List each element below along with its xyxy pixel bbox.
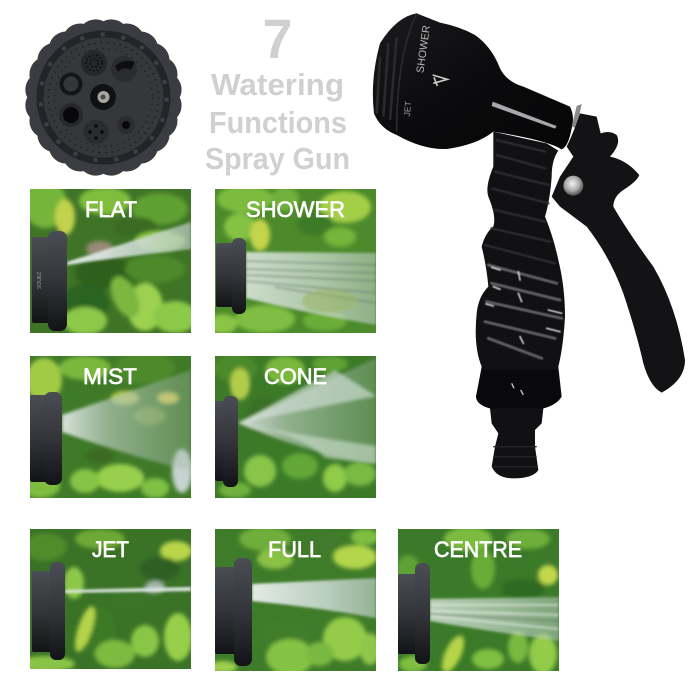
panel: centre [396,527,559,676]
icon: small jet outlet [117,116,135,134]
label: jet: JET [92,537,129,562]
gun trigger [552,113,685,393]
nozzle: full [215,558,252,666]
dial text: JET [402,100,413,117]
gun head [373,13,582,149]
panel: cone [213,354,376,500]
label: flat: FLAT [85,197,137,222]
shine stripe [492,102,557,129]
trigger rivet [563,176,583,196]
dial text [402,24,447,117]
title: Spray Gun [205,141,350,176]
icon: mist outlet [81,50,107,76]
spray: full [252,578,376,618]
nozzle: centre [398,563,430,664]
icon: flat slot outlet [111,56,137,82]
panel: shower [209,185,376,334]
panel: mist [30,356,191,498]
nozzle: jet [32,562,65,660]
label: full: FULL [268,537,321,562]
nozzle: cone [215,396,238,487]
icon: three hole outlet [84,120,108,144]
icon: ring outlet [60,72,82,96]
icon: large hole outlet [59,103,83,127]
label: centre: CENTRE [434,537,522,562]
panel: flat [30,189,191,333]
nozzle: flat: SOUEZ [37,272,43,289]
icon: centre jet [90,84,116,110]
label: shower: SHOWER [246,197,345,222]
spray: cone [238,358,376,464]
nozzle: shower [216,238,246,314]
title: Watering [211,67,344,102]
grip ribs [485,140,562,358]
label: mist: MIST [83,364,137,389]
spray gun [373,13,685,478]
spray: centre [430,597,559,641]
gun handle [476,132,565,478]
spray: flat [67,222,191,265]
title: 7 [262,7,292,70]
title: Functions [209,105,347,140]
spray: jet [65,587,191,593]
panel: full [209,527,380,675]
spray: shower [246,252,376,325]
label: cone: CONE [264,364,327,389]
dial text: SHOWER [414,24,433,74]
nozzle: flat [32,231,67,331]
spray: mist [62,370,191,471]
panel: jet [30,529,191,669]
icon: nozzle dial face [25,19,182,176]
nozzle: mist [30,392,62,485]
title [205,7,350,176]
